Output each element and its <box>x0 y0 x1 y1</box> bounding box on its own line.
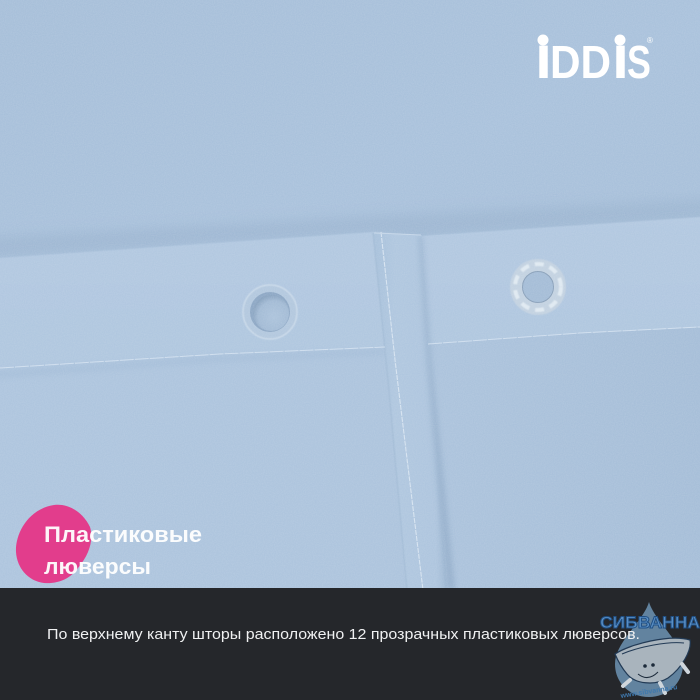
top hem band <box>0 215 700 385</box>
heading <box>44 522 202 579</box>
upper fabric <box>0 0 700 300</box>
watermark: drop <box>615 602 683 697</box>
flap top edge <box>374 233 421 235</box>
bathtub <box>615 638 690 683</box>
watermark: Сибванна <box>600 613 700 700</box>
fold shadow above the top hem <box>0 198 700 260</box>
watermark url: www.sibvanna.ru <box>619 684 678 700</box>
icon: left grommet <box>243 285 297 339</box>
tub smile <box>638 672 658 678</box>
hem stitching <box>0 347 385 368</box>
tub rim <box>622 643 684 654</box>
flap left edge <box>373 233 407 590</box>
heading line 1: Пластиковые <box>44 522 202 547</box>
tub feet <box>623 664 688 693</box>
logo letter i: ı <box>612 23 629 91</box>
watermark name: СИБВАННА <box>600 613 700 632</box>
central flap <box>373 232 455 590</box>
heading line 2: люверсы <box>44 554 151 579</box>
tub face <box>643 663 655 668</box>
icon: right grommet <box>510 259 566 315</box>
pink blob <box>16 505 91 583</box>
logo dot <box>538 34 548 46</box>
logo letter i: ı <box>535 23 552 91</box>
logo letters DD: DD <box>550 37 611 88</box>
logo letter S: S <box>627 37 651 88</box>
panel: dark footer <box>0 588 700 700</box>
logo dot <box>614 34 626 46</box>
flap stitching <box>381 232 423 590</box>
logo: iDDiS <box>535 23 653 91</box>
flap right edge shadow <box>419 236 455 590</box>
footer text: По верхнему канту шторы расположено 12 прозрачных пластиковых люверсов. <box>47 626 640 643</box>
shadow beneath left stitching <box>0 349 385 380</box>
registered mark: ® <box>647 36 653 45</box>
lower fabric <box>0 327 700 590</box>
